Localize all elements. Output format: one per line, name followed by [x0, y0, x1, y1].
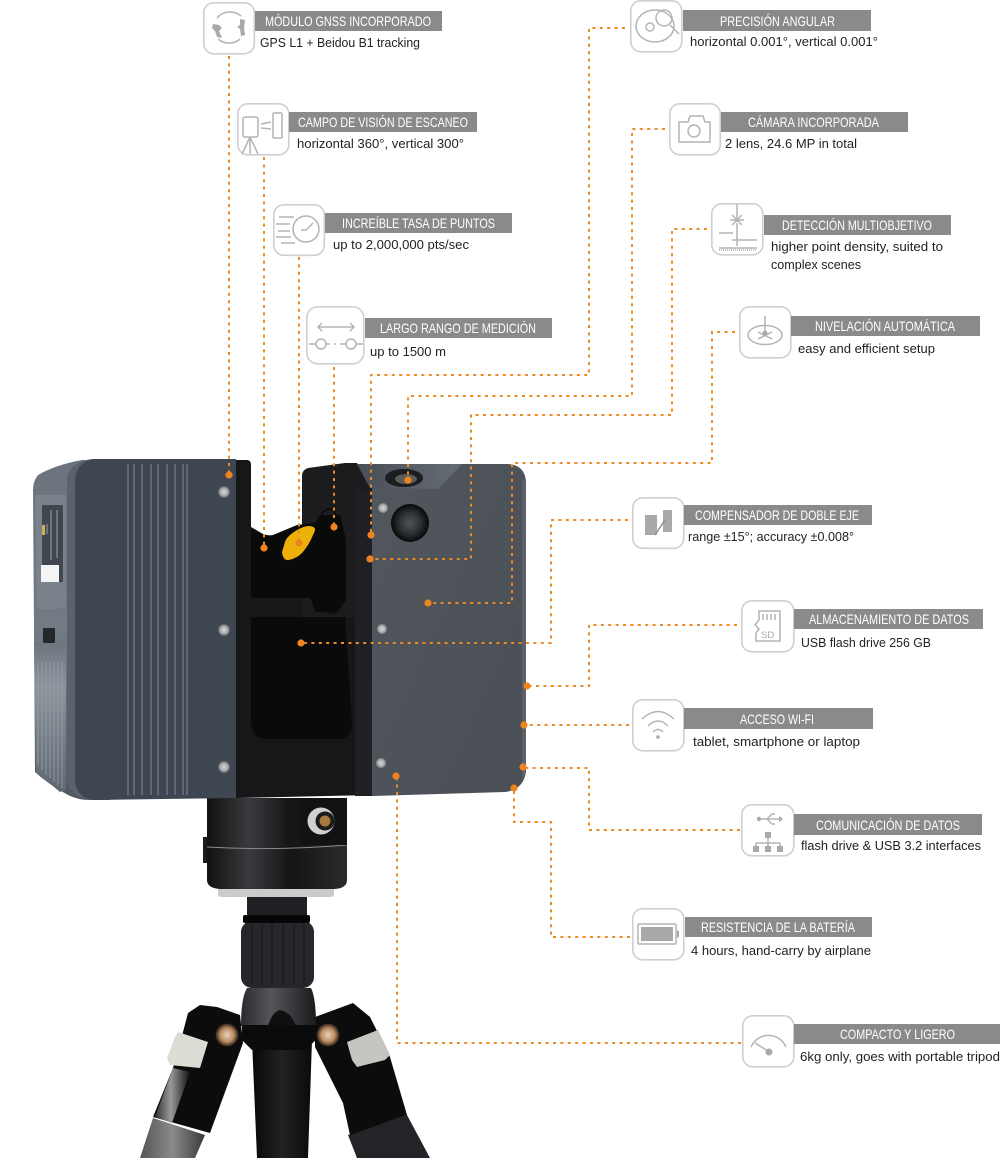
heading bar: [683, 10, 871, 31]
heading bar: [365, 318, 552, 338]
icon: scanner and wall: [238, 104, 289, 155]
heading bar: [791, 316, 980, 336]
description: up to 1500 m: [370, 344, 446, 359]
scanner on tripod photo illustration: [33, 459, 526, 1158]
heading bar: COMPACTO Y LIGERO: [840, 1026, 955, 1042]
connector: auto level: [424, 332, 735, 607]
back shell: [33, 460, 100, 800]
left bracket: [153, 1005, 243, 1133]
callout: long range: [307, 307, 552, 364]
left bolt: [216, 1024, 238, 1046]
callout: auto leveling: [740, 307, 980, 358]
right clip: [347, 1030, 390, 1067]
connector: GNSS: [225, 56, 233, 479]
heading bar: [289, 112, 477, 132]
connector: range: [330, 367, 338, 531]
connector: storage: [523, 625, 737, 690]
icon: scale gauge: [743, 1016, 794, 1067]
description: flash drive & USB 3.2 interfaces: [801, 838, 981, 853]
heading bar: DETECCIÓN MULTIOBJETIVO: [782, 217, 932, 233]
heading bar: [325, 213, 512, 233]
yellow grip: [282, 526, 315, 560]
heading bar: [684, 505, 872, 525]
heading bar: PRECISIÓN ANGULAR: [720, 13, 835, 29]
icon: compensator: [633, 498, 684, 548]
description: range ±15°; accuracy ±0.008°: [688, 529, 854, 544]
right tube: [348, 1115, 430, 1158]
heading bar: NIVELACIÓN AUTOMÁTICA: [815, 318, 956, 334]
callout: field of view: [238, 104, 477, 155]
heading bar: [794, 609, 983, 629]
connector: battery: [510, 784, 630, 937]
icon: SD card: SD: [761, 630, 774, 641]
neck: [251, 515, 346, 612]
tripod: [140, 897, 430, 1158]
heading bar: CAMPO DE VISIÓN DE ESCANEO: [298, 114, 468, 130]
top strip: [357, 464, 462, 489]
icon: disc and magnifier: [631, 1, 682, 52]
heading bar: COMUNICACIÓN DE DATOS: [816, 817, 960, 833]
black center yoke: [235, 460, 372, 798]
description: up to 2,000,000 pts/sec: [333, 237, 470, 252]
left tube: [140, 1118, 205, 1158]
description: 2 lens, 24.6 MP in total: [725, 136, 857, 151]
description: GPS L1 + Beidou B1 tracking: [260, 35, 420, 50]
lower opening: [251, 617, 352, 739]
grip knob: [241, 921, 314, 988]
callout: GNSS module: [204, 3, 442, 54]
connector: compact: [392, 772, 741, 1043]
description: tablet, smartphone or laptop: [693, 734, 860, 749]
icon: laser on surfaces: [712, 204, 763, 255]
callout: dual-axis compensator: [633, 498, 872, 548]
top lens: [385, 469, 423, 487]
left housing: [33, 459, 236, 800]
callout: battery life: [633, 909, 872, 960]
connector: point rate: [295, 257, 303, 547]
right housing panel: [357, 464, 526, 796]
icon: SD card: [742, 601, 794, 652]
connector: [300, 798, 347, 845]
heading bar: [684, 708, 873, 729]
front face: [75, 459, 236, 800]
callout: angular precision: [631, 1, 878, 52]
right bracket: [315, 1003, 407, 1135]
connector: wifi: [520, 721, 629, 729]
rotation ring: [321, 509, 338, 614]
neck: [247, 897, 307, 916]
icon: camera: [670, 104, 720, 155]
heading bar: ACCESO WI-FI: [740, 711, 814, 727]
heading bar: INCREÍBLE TASA DE PUNTOS: [342, 215, 495, 231]
heading bar: CÁMARA INCORPORADA: [748, 114, 880, 130]
icon: range arrows: [307, 307, 364, 364]
heading bar: RESISTENCIA DE LA BATERÍA: [701, 919, 856, 935]
head dome: [241, 988, 316, 1026]
label plate: [35, 495, 66, 610]
heading bar: MÓDULO GNSS INCORPORADO: [265, 13, 431, 29]
left clip: [167, 1032, 208, 1068]
heading bar: [255, 11, 442, 31]
right arm: [302, 463, 372, 617]
heading bar: LARGO RANGO DE MEDICIÓN: [380, 320, 536, 336]
callout: point rate: [274, 205, 512, 255]
heading bar: [721, 112, 908, 132]
icon: stopwatch: [274, 205, 324, 255]
callout: compact and light: [743, 1016, 1000, 1067]
description: 4 hours, hand-carry by airplane: [691, 943, 871, 958]
connector: field of view: [260, 157, 268, 552]
center leg: [252, 1040, 312, 1158]
heading bar: [685, 917, 872, 937]
connector: compensator: [297, 520, 628, 647]
icon: wifi: [633, 700, 684, 751]
connector: camera: [404, 129, 665, 484]
icon: USB and network: [742, 805, 794, 856]
description: higher point density, suited to: [771, 239, 943, 254]
camera lens: [391, 504, 429, 542]
description: horizontal 360°, vertical 300°: [297, 136, 464, 151]
screws: [218, 486, 389, 774]
description: complex scenes: [771, 257, 861, 272]
heading bar: COMPENSADOR DE DOBLE EJE: [695, 507, 859, 523]
description: horizontal 0.001°, vertical 0.001°: [690, 34, 878, 49]
heading bar: [794, 814, 982, 835]
battery door: [34, 628, 66, 792]
ribs: [128, 464, 187, 795]
heading bar: [794, 1024, 1000, 1044]
description: [771, 239, 943, 272]
callout: multi-target detection: [712, 204, 951, 272]
right bolt: [316, 1024, 340, 1046]
connector: angular precision: [367, 28, 625, 539]
icon: level disc: [740, 307, 791, 358]
callout: wifi access: [633, 700, 873, 751]
callout: built-in camera: [670, 104, 908, 155]
icon: satellites: [204, 3, 254, 54]
description: easy and efficient setup: [798, 341, 935, 356]
connector: multi-target: [366, 229, 707, 563]
heading bar: [764, 215, 951, 235]
connector: data communication: [519, 763, 740, 830]
bevel: [67, 459, 110, 800]
base cylinder: [203, 798, 347, 897]
callout: data storage: [742, 601, 983, 652]
description: 6kg only, goes with portable tripod: [800, 1049, 1000, 1064]
left strip: [235, 460, 372, 798]
callout: data communication: [742, 805, 982, 856]
description: USB flash drive 256 GB: [801, 635, 931, 650]
icon: battery: [633, 909, 684, 960]
